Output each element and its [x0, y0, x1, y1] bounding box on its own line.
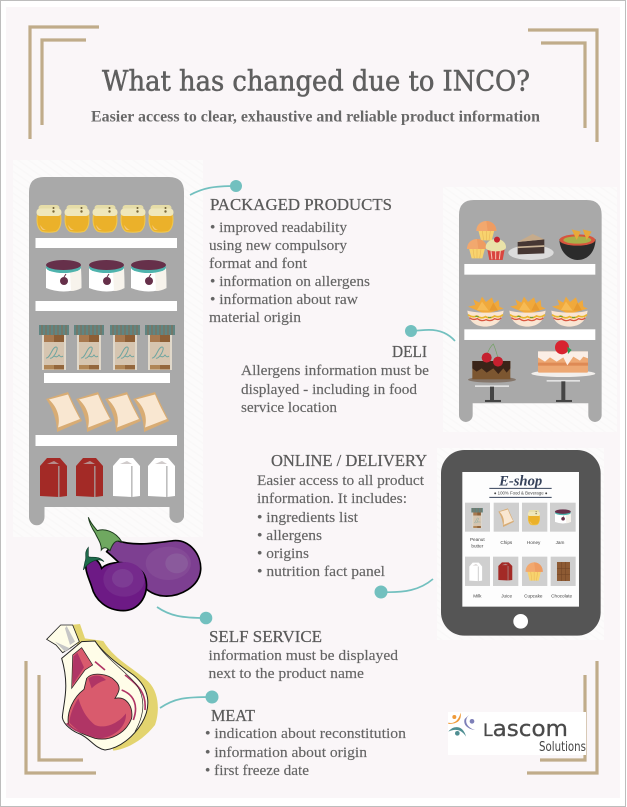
product icons [469, 508, 571, 581]
yoghurt pots [46, 260, 166, 292]
bone [47, 625, 79, 653]
text block: packaged products: material origin [209, 310, 302, 326]
text block: deli: service location [241, 400, 338, 416]
text block: meat [205, 706, 407, 779]
text block: meat: • indication about reconstitution [205, 726, 407, 742]
text block: self service: SELF SERVICE [209, 627, 322, 646]
illustration: eggplants [83, 517, 201, 611]
text block: packaged products: using new compulsory [209, 238, 348, 254]
text block: online / delivery: • ingredients list [257, 510, 359, 526]
text block: meat: • first freeze date [205, 763, 309, 779]
connector: self service [157, 607, 212, 624]
product labels: Cupcake [524, 593, 543, 598]
sponge cake [531, 340, 595, 402]
text block: packaged products: • information on allergens [210, 274, 370, 290]
eye of meat [68, 674, 132, 739]
text block: meat: • information about origin [205, 745, 368, 761]
nacho bowls [467, 297, 588, 327]
fridge body [29, 177, 184, 525]
text block: self service [208, 627, 399, 682]
text block: online / delivery: information. It includes: [257, 491, 407, 507]
shop heading: ● 100% Food & Beverage ● [494, 490, 548, 495]
cake slice [508, 234, 554, 260]
honey jars [36, 205, 174, 232]
text block: deli: Allergens information must be [241, 363, 429, 379]
guacamole bowl [559, 229, 596, 260]
text block: packaged products [209, 195, 392, 326]
shop heading [489, 473, 552, 497]
subtitle: Easier access to clear, exhaustive and reliable product information [91, 108, 540, 126]
bracket: bottom right [527, 661, 597, 773]
text block: self service: information must be displayed [208, 648, 399, 664]
screen [462, 472, 579, 607]
connector: packaged products [190, 180, 242, 195]
title: What has changed due to INCO? [102, 64, 530, 98]
product labels: Chips [500, 540, 513, 545]
text block: online / delivery: ONLINE / DELIVERY [271, 451, 427, 470]
textured panel: left fridge [13, 160, 203, 537]
illustration: meat [47, 624, 158, 751]
product labels: butter [471, 543, 484, 548]
connector: online [374, 579, 433, 598]
connector: deli [405, 325, 455, 341]
text block: packaged products: format and font [209, 256, 308, 272]
text block: packaged products: • information about raw [210, 292, 358, 308]
text block: online / delivery: • allergens [257, 528, 322, 544]
connector: meat [160, 690, 218, 708]
textured panel: tablet [437, 448, 604, 640]
text block: online / delivery: Easier access to all product [257, 473, 425, 489]
logo wordmark: Lascom [483, 717, 568, 742]
text block: deli: DELI [392, 342, 427, 361]
spice jars [39, 325, 175, 370]
product labels: Jam [556, 540, 565, 545]
yellow backing [70, 624, 158, 751]
cupcakes [467, 221, 506, 260]
logo tagline: Solutions [539, 740, 586, 755]
shelves [36, 238, 177, 446]
illustration: e-shop tablet [441, 450, 601, 636]
bracket: top left [30, 27, 99, 139]
product labels [470, 537, 573, 598]
rib meat [72, 648, 93, 688]
tablet body [441, 450, 601, 636]
product labels: Honey [527, 540, 541, 545]
logo icon [448, 713, 475, 737]
cartons [40, 458, 175, 497]
shop heading: E-shop [498, 473, 542, 489]
logo: Lascom Solutions [448, 712, 586, 755]
home button [513, 614, 528, 629]
text block: deli: displayed - including in food [241, 382, 418, 398]
text block: online / delivery: • origins [257, 546, 309, 562]
bracket: bottom left [26, 661, 96, 773]
shelves [464, 264, 595, 275]
product labels: Milk [473, 593, 482, 598]
product labels: Juice [501, 593, 513, 598]
illustration: packaged products fridge [29, 177, 184, 525]
marbling [67, 662, 145, 733]
fat outline [62, 641, 148, 750]
illustration: deli fridge [459, 200, 602, 422]
textured panel: right fridge [443, 187, 617, 432]
text block: online / delivery [257, 451, 427, 580]
text block: meat: MEAT [211, 706, 255, 725]
product labels: Peanut [470, 537, 485, 542]
text block: online / delivery: • nutrition fact panel [257, 564, 385, 580]
text block: packaged products: • improved readability [210, 220, 347, 236]
text block: self service: next to the product name [208, 666, 364, 682]
bracket: top right [528, 30, 597, 142]
chocolate cake [468, 344, 516, 402]
bread [46, 392, 169, 432]
fridge body [459, 200, 602, 422]
product labels: Chocolate [551, 593, 573, 598]
product cells [465, 503, 576, 586]
text block: deli [241, 342, 429, 416]
text block: packaged products: PACKAGED PRODUCTS [210, 195, 392, 214]
